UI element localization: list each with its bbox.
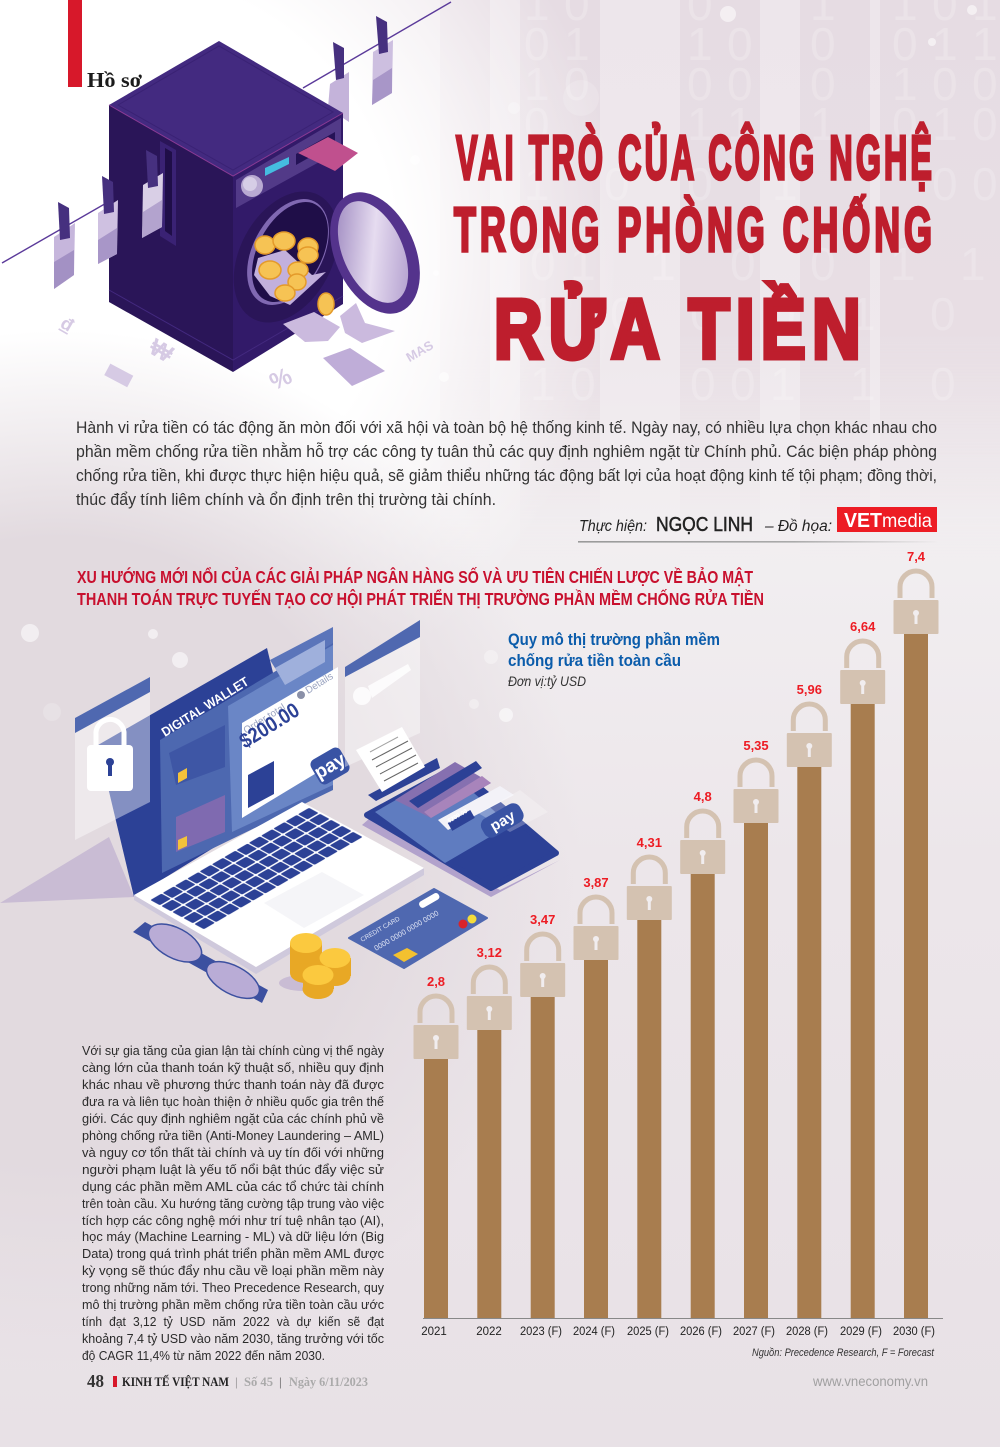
background: 1 <box>650 238 676 290</box>
bar 2024: 3,87 <box>583 875 609 890</box>
background: 1 <box>890 238 916 290</box>
body paragraph: phòng chống rửa tiền (Anti-Money Laundering – AML) <box>82 1128 384 1143</box>
receipt <box>356 727 440 801</box>
intro paragraph: Hành vi rửa tiền có tác động ăn mòn đối với xã hội và toàn bộ hệ thống kinh tế. Ngày nay, có nhiều lựa chọn khác nhau cho <box>76 419 937 437</box>
background: 0 <box>727 18 753 70</box>
body paragraph: độ CAGR 11,4% từ năm 2022 đến năm 2030. <box>82 1348 325 1363</box>
x axis labels: 2026 (F) <box>680 1326 722 1338</box>
clothesline <box>2 2 451 263</box>
bar 2028: 5,96 <box>797 682 822 697</box>
byline: Thực hiện: <box>579 518 647 535</box>
footer: magazine info: | <box>235 1374 238 1389</box>
illustration: digital wallet laptop <box>0 620 560 1006</box>
bank card in slot <box>298 137 358 171</box>
phone <box>362 761 560 897</box>
chart title: chống rửa tiền toàn cầu <box>508 652 681 670</box>
chart title: Quy mô thị trường phần mềm <box>508 631 720 649</box>
footer: magazine info: KINH TẾ VIỆT NAM <box>122 1374 229 1389</box>
laptop screen: Details <box>304 671 336 697</box>
laptop keyboard base <box>134 802 424 974</box>
illustration: washing machine <box>2 2 451 396</box>
intro paragraph <box>76 419 937 509</box>
background: 1 <box>524 58 550 110</box>
background: 0 <box>810 238 836 290</box>
floating window: lock <box>75 677 150 840</box>
faint currency symbols on floor: MAS <box>403 337 436 365</box>
background: 0 <box>524 98 550 150</box>
bar 2021: 2,8 <box>427 974 445 989</box>
pay button <box>308 745 352 787</box>
bar 2026: 4,8 <box>694 789 712 804</box>
laptop screen: pay <box>311 749 350 784</box>
credit card: 0000 0000 0000 0000 <box>372 908 440 953</box>
background: 0 <box>932 158 958 210</box>
x axis labels: 2029 (F) <box>840 1326 882 1338</box>
bar 2029 <box>840 619 885 1318</box>
body paragraph: khoảng 7,4 tỷ USD vào năm 2030, tăng trưởng với tốc <box>82 1331 384 1346</box>
x axis labels: 2023 (F) <box>520 1326 562 1338</box>
background: 0 <box>610 288 636 340</box>
QR code <box>248 761 274 808</box>
glasses <box>133 916 268 1006</box>
byline: – Đồ họa: <box>764 518 832 535</box>
background: 0 <box>690 358 716 410</box>
background: 0 <box>972 58 998 110</box>
chart source: Nguồn: Precedence Research, F = Forecast <box>752 1347 935 1359</box>
section heading: XU HƯỚNG MỚI NỔI CỦA CÁC GIẢI PHÁP NGÂN HÀNG SỐ VÀ ƯU TIÊN CHIẾN LƯỢC VỀ BẢO MẬT <box>77 566 753 587</box>
bar 2028 <box>787 682 832 1318</box>
x axis labels: 2030 (F) <box>893 1326 935 1338</box>
background: 0 <box>524 18 550 70</box>
body paragraph: người phạm luật là yếu tố nổi bật thúc đẩy việc sử <box>82 1162 384 1177</box>
floating window: key <box>345 620 420 767</box>
control panel <box>236 118 341 208</box>
bar 2025: 4,31 <box>637 835 662 850</box>
bar 2023: 3,47 <box>530 912 555 927</box>
credit card <box>349 889 487 968</box>
background: 0 <box>690 288 716 340</box>
bar 2030: 7,4 <box>907 549 926 564</box>
body paragraph: mô thị trường phần mềm chống rửa tiền toàn cầu ước <box>82 1297 384 1312</box>
title <box>454 124 936 376</box>
section tab <box>68 0 82 87</box>
drum with coins <box>213 174 359 340</box>
background: 0 <box>932 58 958 110</box>
bar 2022: 3,12 <box>477 945 502 960</box>
x axis labels: 2028 (F) <box>786 1326 828 1338</box>
logo: VETmedia <box>837 507 937 532</box>
laptop screen: Order total <box>242 702 288 737</box>
faint currency symbols on floor: ₩ <box>144 334 178 369</box>
bar 2027 <box>734 738 778 1318</box>
background: 1 <box>810 98 836 150</box>
background: 1 <box>960 238 986 290</box>
background: 1 <box>972 18 998 70</box>
body paragraph: tính đạt 3,12 tỷ USD năm 2022 và dự kiến sẽ đạt <box>82 1314 384 1329</box>
footer: magazine info <box>87 1371 368 1391</box>
background: 0 <box>810 18 836 70</box>
footer: magazine info: Số 45 <box>244 1374 273 1389</box>
background: 0 <box>930 358 956 410</box>
door <box>312 178 438 328</box>
background: 0 <box>972 158 998 210</box>
background: 1 <box>892 58 918 110</box>
section heading: THANH TOÁN TRỰC TUYẾN TẠO CƠ HỘI PHÁT TRIỂN THỊ TRƯỜNG PHẦN MỀM CHỐNG RỬA TIỀN <box>77 588 764 609</box>
intro paragraph: phần mềm chống rửa tiền nhằm hỗ trợ các công ty tuân thủ các quy định nghiêm ngặt từ Chính phủ. Các biện pháp phòng <box>76 442 937 461</box>
body paragraph <box>82 1043 385 1363</box>
background: 0 <box>892 98 918 150</box>
logo: VETmedia: media <box>882 511 932 532</box>
bar 2030 <box>894 549 938 1318</box>
background: 0 <box>604 158 630 210</box>
intro paragraph: thúc đẩy tính liêm chính và ổn định trên thị trường tài chính. <box>76 491 496 509</box>
background: 0 <box>687 58 713 110</box>
faint currency symbols on floor: % <box>265 363 296 396</box>
x axis labels: 2021 <box>421 1326 447 1338</box>
background: 0 <box>687 158 713 210</box>
body paragraph: Với sự gia tăng của gian lận tài chính cùng vị thế ngày <box>82 1043 384 1058</box>
body paragraph: kỳ vọng sẽ thúc đẩy nhu cầu về loại phần mềm này <box>82 1263 384 1278</box>
footer: magazine info: Ngày 6/11/2023 <box>289 1374 368 1389</box>
background: 1 <box>770 358 796 410</box>
byline: NGỌC LINH <box>656 514 753 536</box>
bar 2023 <box>520 912 565 1318</box>
background: 0 <box>810 58 836 110</box>
bar 2022 <box>467 945 512 1318</box>
faint currency symbols on floor <box>53 310 436 396</box>
x axis labels: 2024 (F) <box>573 1326 615 1338</box>
background: 0 <box>892 18 918 70</box>
background: 1 <box>564 18 590 70</box>
footer: magazine info: | <box>279 1374 282 1389</box>
background: 0 <box>730 358 756 410</box>
hanging banknote behind machine <box>328 72 349 122</box>
chart title: Đơn vị:tỷ USD <box>508 674 586 689</box>
section label: Hồ sơ <box>87 68 142 92</box>
bar 2024 <box>574 875 618 1318</box>
background: 0 <box>564 58 590 110</box>
background: 0 <box>727 58 753 110</box>
credit card: CREDIT CARD <box>360 915 402 944</box>
background: 1 <box>772 158 798 210</box>
bar 2026 <box>680 789 725 1318</box>
floating banknotes on floor <box>283 303 395 386</box>
background: 0 <box>972 98 998 150</box>
background: 0 <box>770 288 796 340</box>
x axis labels <box>421 1326 935 1338</box>
banknotes on the line <box>54 40 393 289</box>
card 1 on screen <box>169 725 225 785</box>
intro paragraph: chống rửa tiền, khi được thực hiện hiệu quả, sẽ giảm thiểu những tác động bất lợi của hoạt động kinh tế tội phạm; đồng thời, <box>76 467 937 485</box>
laptop shadow <box>0 837 134 903</box>
x axis labels: 2027 (F) <box>733 1326 775 1338</box>
x axis labels: 2022 <box>476 1326 502 1338</box>
background: 1 <box>524 158 550 210</box>
background: 1 <box>850 358 876 410</box>
background: 1 <box>570 238 596 290</box>
background: 1 <box>687 18 713 70</box>
section heading <box>77 566 764 609</box>
x axis labels: 2025 (F) <box>627 1326 669 1338</box>
laptop screen <box>98 627 352 897</box>
background: 1 <box>687 98 713 150</box>
background: 0 <box>530 238 556 290</box>
byline <box>578 514 938 543</box>
body paragraph: học máy (Machine Learning - ML) và dữ liệu lớn (Big <box>82 1229 384 1244</box>
footer: website: www.vneconomy.vn <box>812 1373 928 1389</box>
bar 2025 <box>627 835 672 1318</box>
body paragraph: càng lớn của thanh toán kỹ thuật số, nhiều quy định <box>82 1060 384 1075</box>
body paragraph: đưa ra và liên tục hoàn thiện ở nhiều quốc gia trên thế <box>82 1094 385 1109</box>
chart title <box>508 631 720 689</box>
title: RỬA TIỀN <box>494 282 867 376</box>
background: 1 <box>530 358 556 410</box>
footer: magazine info: 48 <box>87 1371 104 1391</box>
bar chart <box>414 549 943 1338</box>
logo: VETmedia: VET <box>844 510 882 532</box>
clothes pegs <box>58 16 388 240</box>
body paragraph: giới. Các quy định nghiêm ngặt của các chính phủ về <box>82 1111 384 1126</box>
background: 1 <box>850 288 876 340</box>
card 2 on screen <box>176 795 225 852</box>
body paragraph: trong những năm tới. Theo Precedence Research, quy <box>82 1280 384 1295</box>
bar 2021 <box>414 974 458 1318</box>
background: 0 <box>930 288 956 340</box>
phone: $200.00 <box>447 808 469 825</box>
body paragraph: Data) trong quá trình phát triển phần mềm AML được <box>82 1246 384 1261</box>
coins <box>279 933 351 999</box>
body paragraph: trên toàn cầu. Xu hướng tăng cường tập trung vào việc <box>82 1196 384 1211</box>
bar 2029: 6,64 <box>850 619 876 634</box>
bar 2027: 5,35 <box>743 738 769 753</box>
faint currency symbols on floor: ₫ <box>53 310 79 343</box>
body paragraph: khác nhau về phương thức thanh toán này đã được <box>82 1077 384 1092</box>
background: 1 <box>727 98 753 150</box>
body paragraph: tích hợp các công nghệ mới như trí tuệ nhân tạo (AI), <box>82 1213 384 1228</box>
background: 0 <box>570 358 596 410</box>
body paragraph: dụng các phần mềm AML của các tổ chức tài chính <box>82 1179 384 1194</box>
phone: pay <box>487 807 519 835</box>
machine body <box>109 41 343 372</box>
laptop screen: $200.00 <box>235 699 304 753</box>
background: 0 <box>730 238 756 290</box>
background: 1 <box>530 288 556 340</box>
body paragraph: và nguy cơ tổn thất tài chính và uy tín đối với những <box>82 1145 384 1160</box>
background: 1 <box>932 98 958 150</box>
laptop screen: DIGITAL WALLET <box>159 674 251 740</box>
background: 1 <box>932 18 958 70</box>
